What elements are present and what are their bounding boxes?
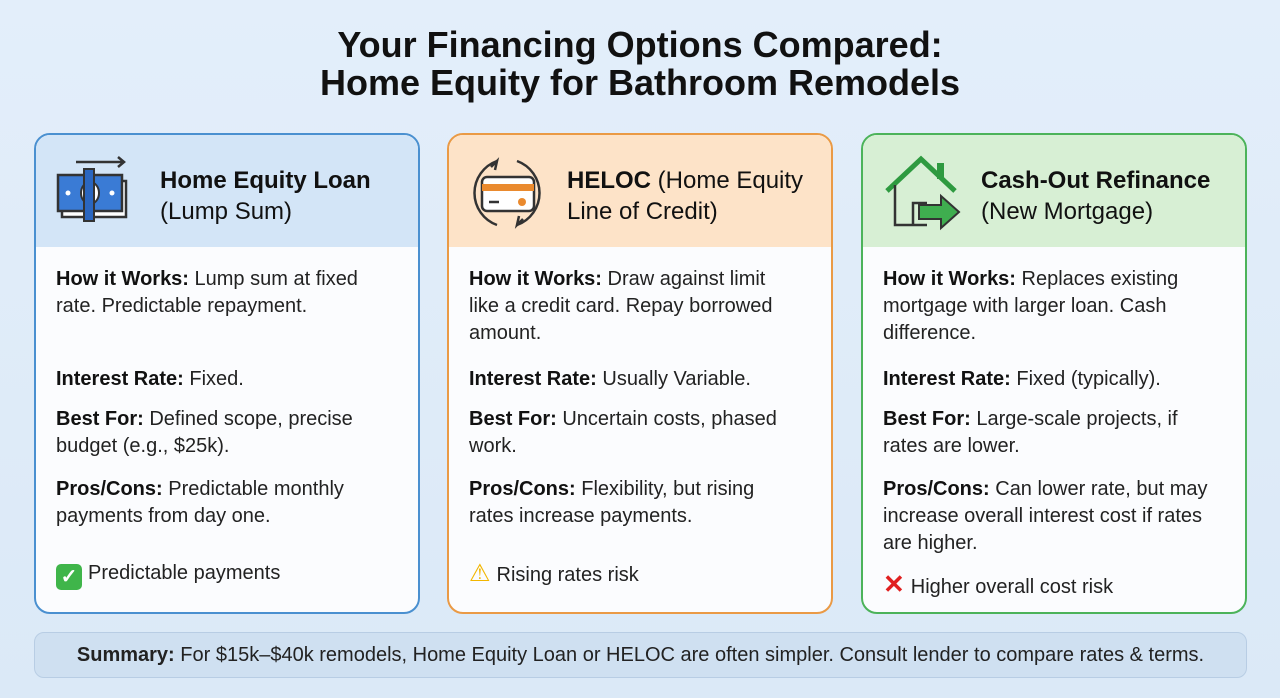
badge: predictable: ✓ (61, 566, 77, 588)
icon: credit card cycle (473, 157, 541, 229)
header: home equity loan (36, 135, 418, 247)
badge: predictable: Predictable payments (88, 562, 280, 584)
header: home equity loan: (Lump Sum) (160, 198, 292, 225)
text: pros/cons (883, 478, 1208, 554)
icon: money (56, 156, 128, 222)
badge: predictable (56, 562, 280, 590)
badge: cost risk: ✕ Higher overall cost risk (883, 569, 1113, 599)
text: how it works: rate. Predictable repayment. (56, 295, 307, 317)
text: interest rate: Interest Rate: Fixed. (56, 368, 244, 390)
badge: risk: ⚠ Rising rates risk (469, 560, 639, 587)
text: best for: Best For: Uncertain costs, phased (469, 408, 777, 430)
text: pros/cons (469, 478, 754, 527)
title (320, 24, 960, 103)
text: best for: budget (e.g., $25k). (56, 435, 229, 457)
text: pros/cons: rates increase payments. (469, 505, 692, 527)
text: best for (883, 408, 1178, 457)
text: how it works (883, 268, 1178, 344)
text: how it works: How it Works: Replaces existing (883, 268, 1178, 290)
text: how it works: like a credit card. Repay borrowed (469, 295, 772, 317)
panel: heloc (447, 133, 833, 614)
text: best for: Best For: Defined scope, precise (56, 408, 353, 430)
summary bar (34, 632, 1247, 678)
icon: house arrow (885, 156, 960, 230)
summary bar: Summary: For $15k–$40k remodels, Home Equity Loan or HELOC are often simpler. Consult lender to compare rates & terms. (77, 644, 1204, 666)
text: pros/cons: Pros/Cons: Can lower rate, but may (883, 478, 1208, 500)
header: refinance (863, 135, 1245, 247)
text: best for: Best For: Large-scale projects, if (883, 408, 1178, 430)
text: pros/cons: Pros/Cons: Predictable monthly (56, 478, 344, 500)
header: heloc: Line of Credit) (567, 198, 718, 225)
title: Home Equity for Bathroom Remodels (320, 62, 960, 103)
text: interest rate: Interest Rate: Usually Variable. (469, 368, 751, 390)
text: how it works: amount. (469, 322, 541, 344)
panel: cash-out refinance (861, 133, 1247, 614)
text: best for (469, 408, 777, 457)
header: refinance: Cash-Out Refinance (981, 167, 1210, 194)
text: how it works (469, 268, 772, 344)
title: Your Financing Options Compared: (337, 24, 943, 65)
text: best for: work. (469, 435, 517, 457)
text: how it works: How it Works: Lump sum at fixed (56, 268, 358, 290)
text: pros/cons: payments from day one. (56, 505, 271, 527)
header: heloc (449, 135, 831, 247)
text: how it works: mortgage with larger loan. Cash (883, 295, 1166, 317)
text: interest rate: Interest Rate: Fixed (typically). (883, 368, 1161, 390)
header: heloc: HELOC (Home Equity (567, 167, 803, 194)
text: best for (56, 408, 353, 457)
panel: home equity loan (34, 133, 420, 614)
text: how it works (56, 268, 358, 317)
text: pros/cons (56, 478, 344, 527)
text: how it works: difference. (883, 322, 976, 344)
text: pros/cons: are higher. (883, 532, 978, 554)
text: best for: rates are lower. (883, 435, 1020, 457)
header: home equity loan: Home Equity Loan (160, 167, 371, 194)
text: pros/cons: increase overall interest cost if rates (883, 505, 1202, 527)
header: refinance: (New Mortgage) (981, 198, 1153, 225)
text: how it works: How it Works: Draw against limit (469, 268, 765, 290)
text: pros/cons: Pros/Cons: Flexibility, but rising (469, 478, 754, 500)
